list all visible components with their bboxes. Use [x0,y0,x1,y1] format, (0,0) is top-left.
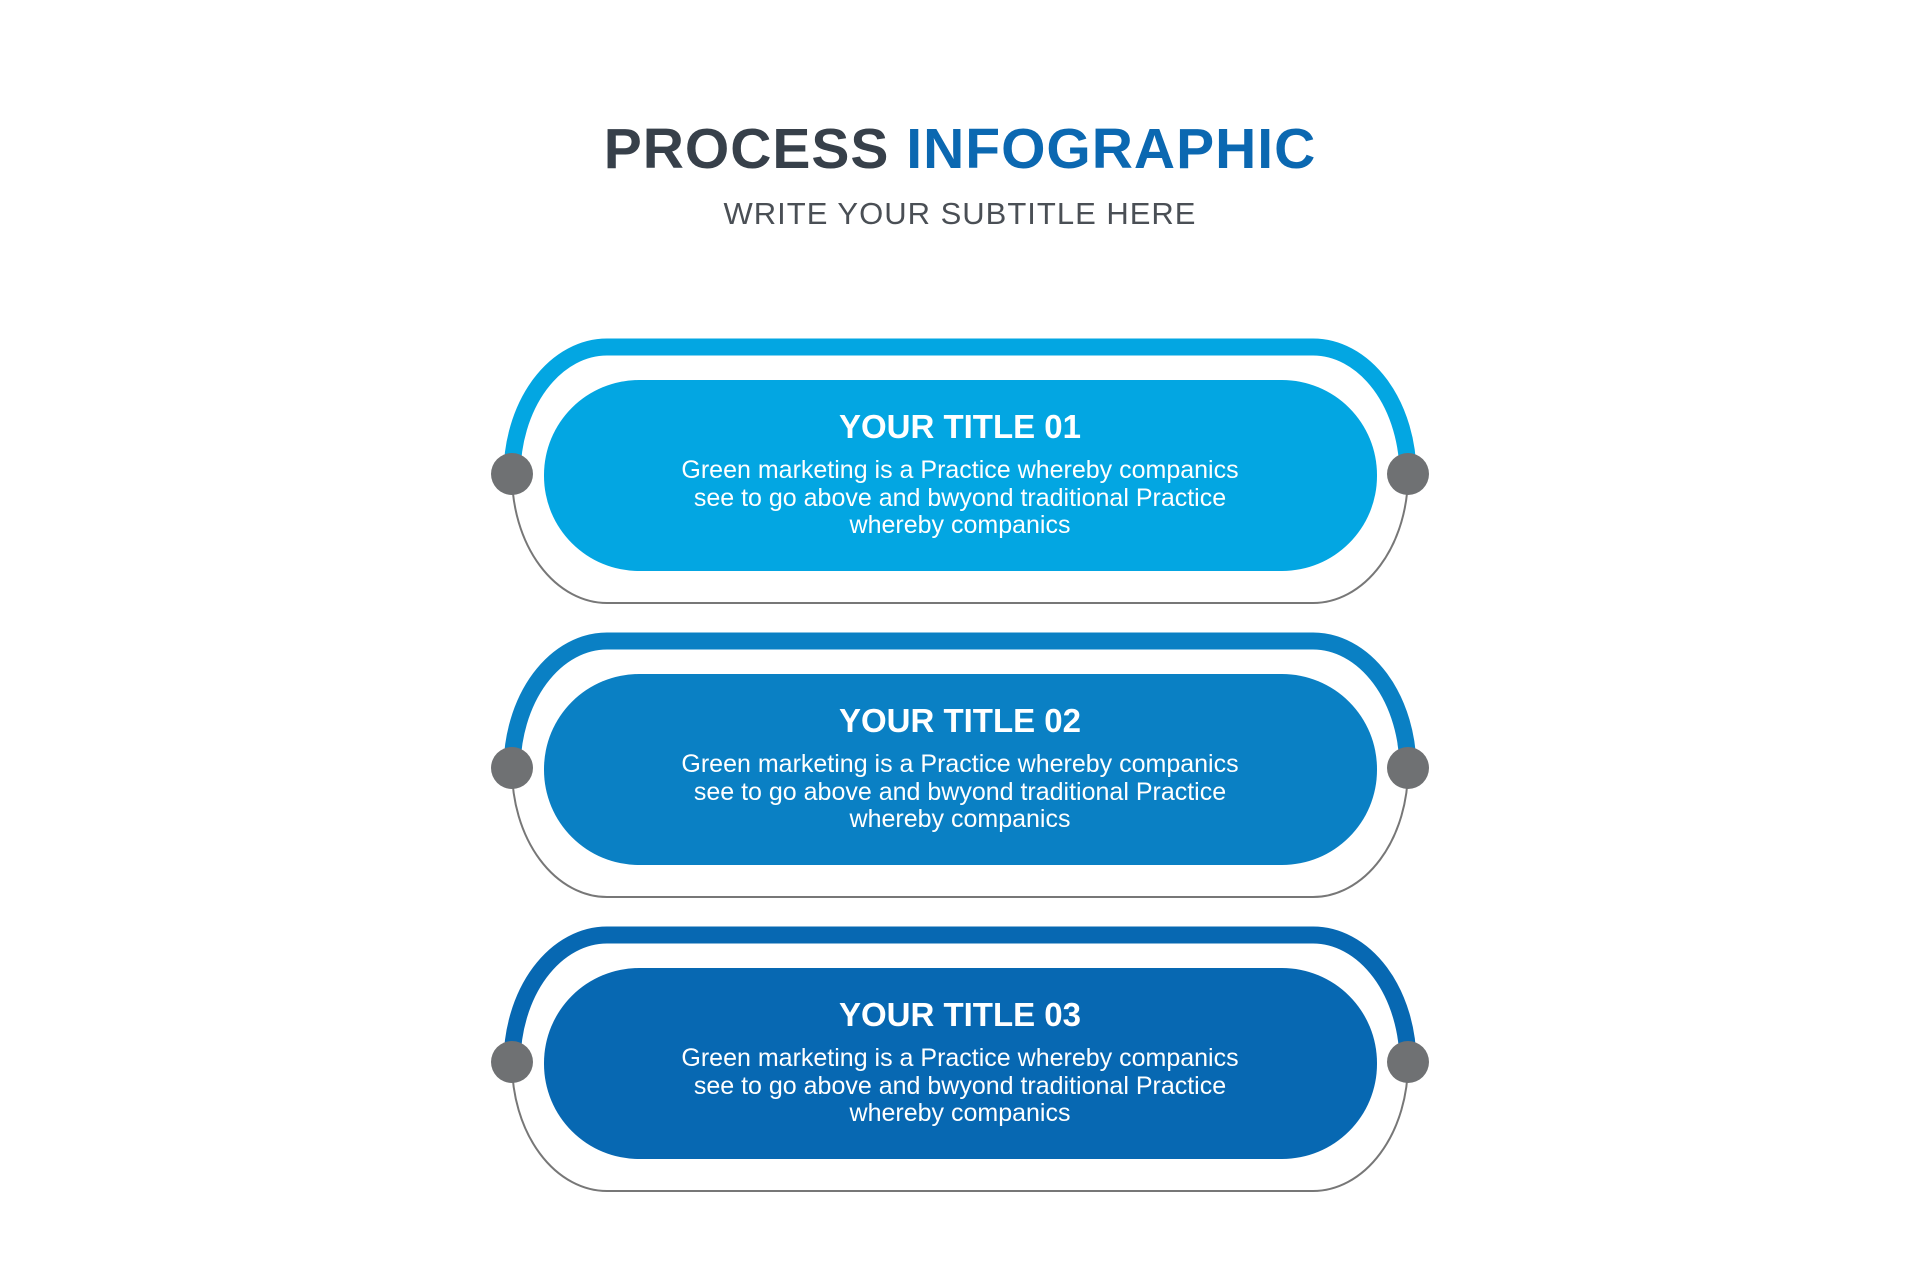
panel: step 1: YOUR TITLE 01 [839,408,1081,445]
panel: step 2 [491,641,1429,897]
panel: step 2: whereby companics [849,805,1070,833]
panel: step 1 [491,347,1429,603]
subtitle: WRITE YOUR SUBTITLE HERE [724,196,1196,231]
panel: step 2: Green marketing is a Practice whereby companics [681,750,1239,778]
panel: step 3: YOUR TITLE 03 [839,996,1081,1033]
panel: step 3: Green marketing is a Practice whereby companics [681,1044,1239,1072]
panel: step 1: whereby companics [849,511,1070,539]
panel: step 3: whereby companics [849,1099,1070,1127]
panel: step 2: see to go above and bwyond traditional Practice [694,778,1226,806]
panel: step 1: see to go above and bwyond traditional Practice [694,484,1226,512]
panel: step 2: YOUR TITLE 02 [839,702,1081,739]
panel: step 3: see to go above and bwyond traditional Practice [694,1072,1226,1100]
process diagram [491,338,1429,1192]
panel: step 3 [491,935,1429,1191]
title: PROCESS INFOGRAPHIC [604,117,1316,181]
panel: step 1: Green marketing is a Practice whereby companics [681,456,1239,484]
